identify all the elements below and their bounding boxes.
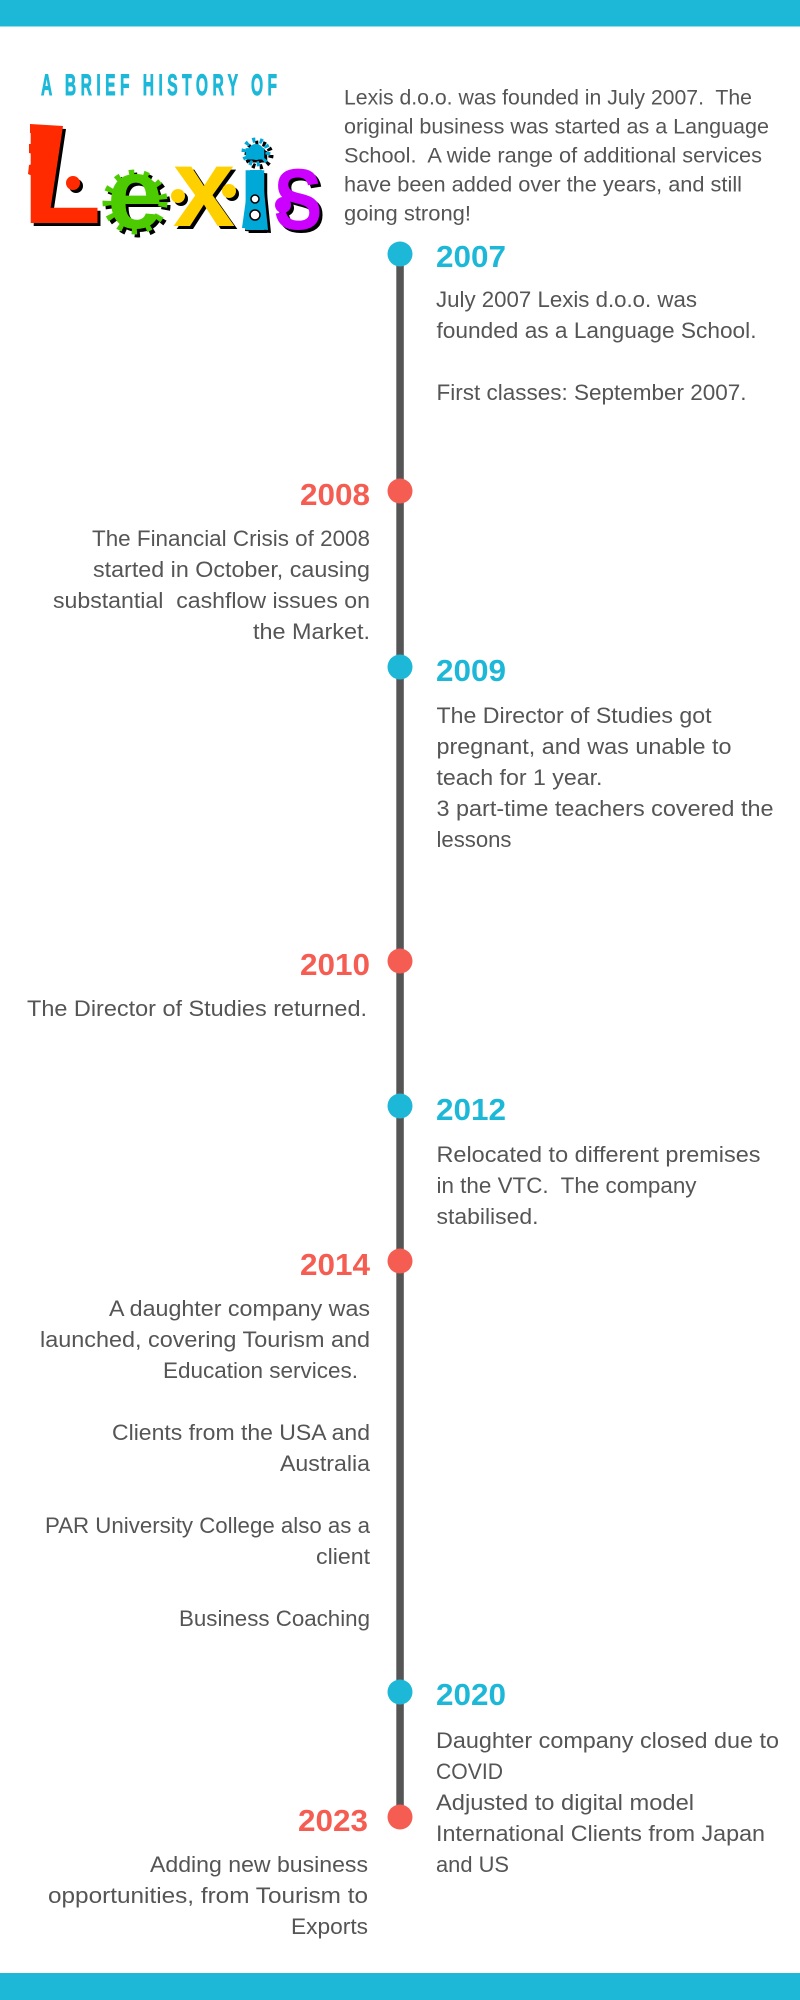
entry: 2020: International Clients from Japan xyxy=(436,1821,765,1846)
logo: Lexis xyxy=(22,100,322,254)
entry: 2007: founded as a Language School. xyxy=(436,318,756,343)
intro paragraph: School. A wide range of additional services xyxy=(344,144,762,168)
entry: 2010 xyxy=(27,947,412,1021)
entry: 2012 xyxy=(388,1092,760,1229)
entry: 2010: 2010 xyxy=(300,947,370,982)
bottom banner bar xyxy=(0,1973,800,2000)
entry: 2009: lessons xyxy=(436,827,512,852)
entry: 2020: Daughter company closed due to xyxy=(436,1728,779,1753)
intro paragraph: original business was started as a Language xyxy=(344,114,769,138)
entry: 2009: 3 part-time teachers covered the xyxy=(436,796,774,821)
entry: 2014: 2014 xyxy=(300,1247,371,1282)
entry: 2014: launched, covering Tourism and xyxy=(40,1327,370,1352)
entry: 2023: 2023 xyxy=(298,1803,368,1838)
entry: 2012: 2012 xyxy=(436,1092,506,1127)
logo letter L: L xyxy=(22,100,102,253)
entry: 2023: opportunities, from Tourism to xyxy=(48,1883,368,1908)
entry: 2020: 2020 xyxy=(436,1677,506,1712)
intro paragraph xyxy=(344,86,769,226)
entry: 2023 xyxy=(48,1803,412,1939)
entry: 2007: 2007 xyxy=(436,239,506,274)
title: a brief history of: A BRIEF HISTORY OF xyxy=(41,69,277,103)
entry: 2014: Australia xyxy=(280,1451,370,1476)
entry: 2014: Business Coaching xyxy=(179,1606,370,1631)
entry: 2007: July 2007 Lexis d.o.o. was xyxy=(436,287,697,312)
entry: 2007: First classes: September 2007. xyxy=(436,380,746,405)
intro paragraph: have been added over the years, and still xyxy=(344,172,742,196)
entry: 2014: A daughter company was xyxy=(109,1296,370,1321)
entry: 2020: and US xyxy=(436,1852,509,1877)
entry: 2014: Education services. xyxy=(163,1358,358,1383)
entry: 2008: started in October, causing xyxy=(93,557,370,582)
entry: 2020 xyxy=(388,1677,779,1877)
timeline vertical line xyxy=(396,254,404,1817)
intro paragraph: going strong! xyxy=(344,202,471,226)
entry: 2008: The Financial Crisis of 2008 xyxy=(92,526,370,551)
entry: 2023: Exports xyxy=(291,1914,368,1939)
entry: 2009: The Director of Studies got xyxy=(436,703,712,728)
logo letter x with dots: x xyxy=(173,125,235,250)
entry: 2007 xyxy=(388,239,756,405)
entry: 2023: Adding new business xyxy=(150,1852,368,1877)
logo details: holes in i xyxy=(250,195,260,220)
top banner bar xyxy=(0,0,800,26)
entry: 2012: in the VTC. The company xyxy=(436,1173,697,1198)
logo letter s with dot: S xyxy=(274,151,322,247)
entry: 2008: substantial cashflow issues on xyxy=(53,588,370,613)
entry: 2008: 2008 xyxy=(300,477,370,512)
entry: 2014 xyxy=(40,1247,412,1631)
entry: 2014: PAR University College also as a xyxy=(45,1513,370,1538)
logo letter e with gear teeth: e xyxy=(107,138,163,250)
entry: 2008: the Market. xyxy=(253,619,370,644)
entry: 2020: Adjusted to digital model xyxy=(436,1790,694,1815)
entry: 2012: Relocated to different premises xyxy=(436,1142,760,1167)
entry: 2008 xyxy=(53,477,412,644)
entry: 2009: teach for 1 year. xyxy=(436,765,602,790)
entry: 2010: The Director of Studies returned. xyxy=(27,996,367,1021)
entry: 2012: stabilised. xyxy=(436,1204,538,1229)
entry: 2020: COVID xyxy=(436,1759,503,1784)
logo letter i with star: i xyxy=(236,129,274,254)
entry: 2014: client xyxy=(316,1544,371,1569)
intro paragraph: Lexis d.o.o. was founded in July 2007. The xyxy=(344,86,752,110)
entry: 2009: 2009 xyxy=(436,653,506,688)
entry: 2009 xyxy=(388,653,774,852)
entry: 2014: Clients from the USA and xyxy=(112,1420,370,1445)
entry: 2009: pregnant, and was unable to xyxy=(436,734,732,759)
